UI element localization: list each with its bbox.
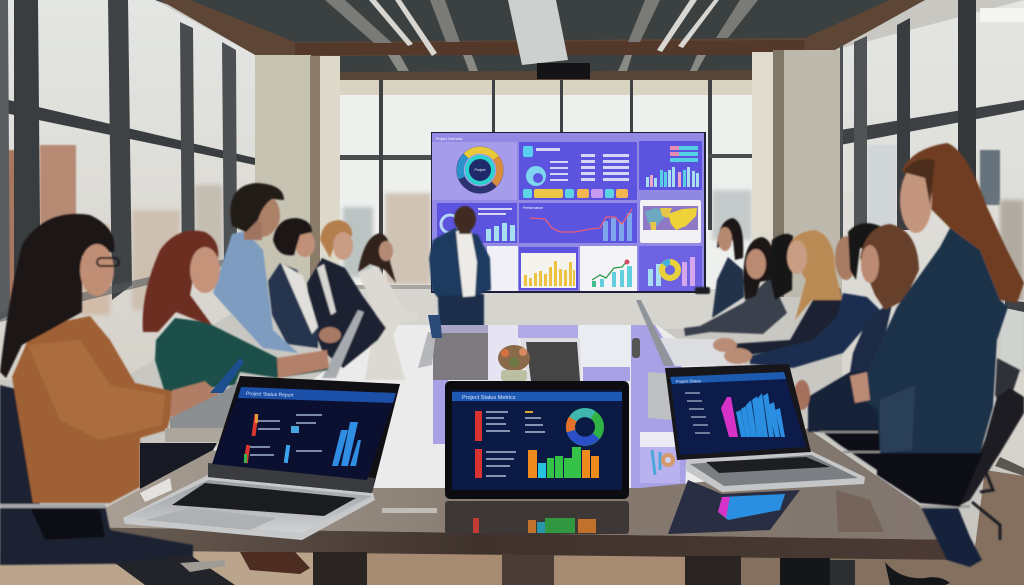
keyboard: [172, 483, 356, 516]
person: man in navy suit: [724, 223, 880, 368]
person: woman in navy blazer: [268, 218, 341, 348]
wall-display reflection: [433, 325, 690, 492]
right chairs: [820, 358, 1024, 567]
person: woman with auburn hair: [794, 224, 919, 432]
person: woman with black hair: [768, 234, 793, 300]
right people group: [684, 143, 1024, 567]
person: woman in white blouse: [358, 233, 419, 380]
projector: [537, 63, 590, 79]
screen: [212, 387, 396, 480]
panel: yellow bar chart: [519, 247, 578, 290]
laptop behind left woman: [140, 382, 238, 489]
laptop: right: Project Status: [676, 378, 701, 384]
person: blond woman: [713, 230, 845, 356]
person: woman in brown jacket: [0, 214, 224, 565]
table: [70, 325, 970, 585]
panel: top right bars: [639, 141, 702, 190]
table legs: [313, 552, 741, 585]
shoes: [240, 552, 310, 574]
wall display dashboard: [431, 132, 706, 293]
chair base and legs right: [780, 558, 950, 585]
panel: donut overview: Project Overview: [436, 137, 463, 141]
person: woman in dark suit with blond hair: [307, 220, 386, 368]
ceiling duct: [508, 0, 568, 65]
ceiling: [155, 0, 925, 80]
hands: [170, 381, 224, 423]
floor: [0, 457, 1024, 585]
laptop: left: [123, 376, 400, 540]
tablet reflection: [445, 501, 629, 534]
dark reflection block: [520, 338, 581, 381]
tablet donut: [570, 412, 600, 442]
person: woman far back: [712, 218, 744, 318]
flower vase: [498, 345, 530, 381]
person: man in light blue shirt: [213, 183, 298, 353]
left phone: [210, 358, 244, 393]
panel: donut overview: [432, 137, 517, 200]
right window wall: [840, 0, 1024, 470]
panel: donut overview: Project: [475, 168, 485, 172]
right laptop reflection: [668, 480, 800, 534]
presenter: [429, 206, 491, 327]
person: woman in grey suit: [684, 237, 787, 336]
back window: [340, 80, 755, 329]
person: woman in green jacket: [143, 230, 329, 393]
office chair: [0, 385, 193, 565]
panel: green growth chart: [580, 246, 637, 291]
bars: [332, 422, 361, 466]
front surface: [70, 428, 970, 540]
hair: [0, 214, 114, 378]
left people group: [143, 183, 419, 393]
screen: [670, 372, 806, 455]
keyboard: [706, 457, 830, 473]
trackpad: [145, 508, 276, 530]
laptop: right: [665, 364, 865, 492]
person: woman in navy blazer far right: [850, 143, 1024, 507]
panel: data table: [519, 142, 637, 200]
left column: [255, 55, 340, 296]
left window wall: [0, 0, 255, 380]
tablet: center: Project Status Metrics: [462, 395, 516, 401]
table edge: [70, 527, 970, 560]
glass top: [70, 325, 970, 540]
jacket: [12, 316, 177, 503]
tablet bars: [528, 447, 599, 478]
back laptops on table: [418, 300, 745, 420]
panel: left mid chart: [437, 203, 517, 243]
bars: [721, 393, 785, 437]
tablet: center: [445, 381, 629, 499]
panel: performance line chart: [519, 203, 637, 243]
panel: performance line chart: Performance: [523, 206, 543, 210]
chair base left: [115, 555, 235, 585]
laptop: back left lid: [322, 310, 364, 378]
laptop: left: Project Status Report: [246, 391, 294, 399]
surface highlights: [140, 478, 884, 532]
right column: [752, 50, 842, 297]
screen bezel: [208, 376, 400, 493]
phone held by far woman: [695, 287, 710, 294]
screen bezel: [665, 364, 811, 460]
panel: bottom right chart and donut: [639, 246, 702, 291]
panel: white chart behind presenter: [487, 246, 518, 291]
panel: world map: [639, 193, 702, 243]
